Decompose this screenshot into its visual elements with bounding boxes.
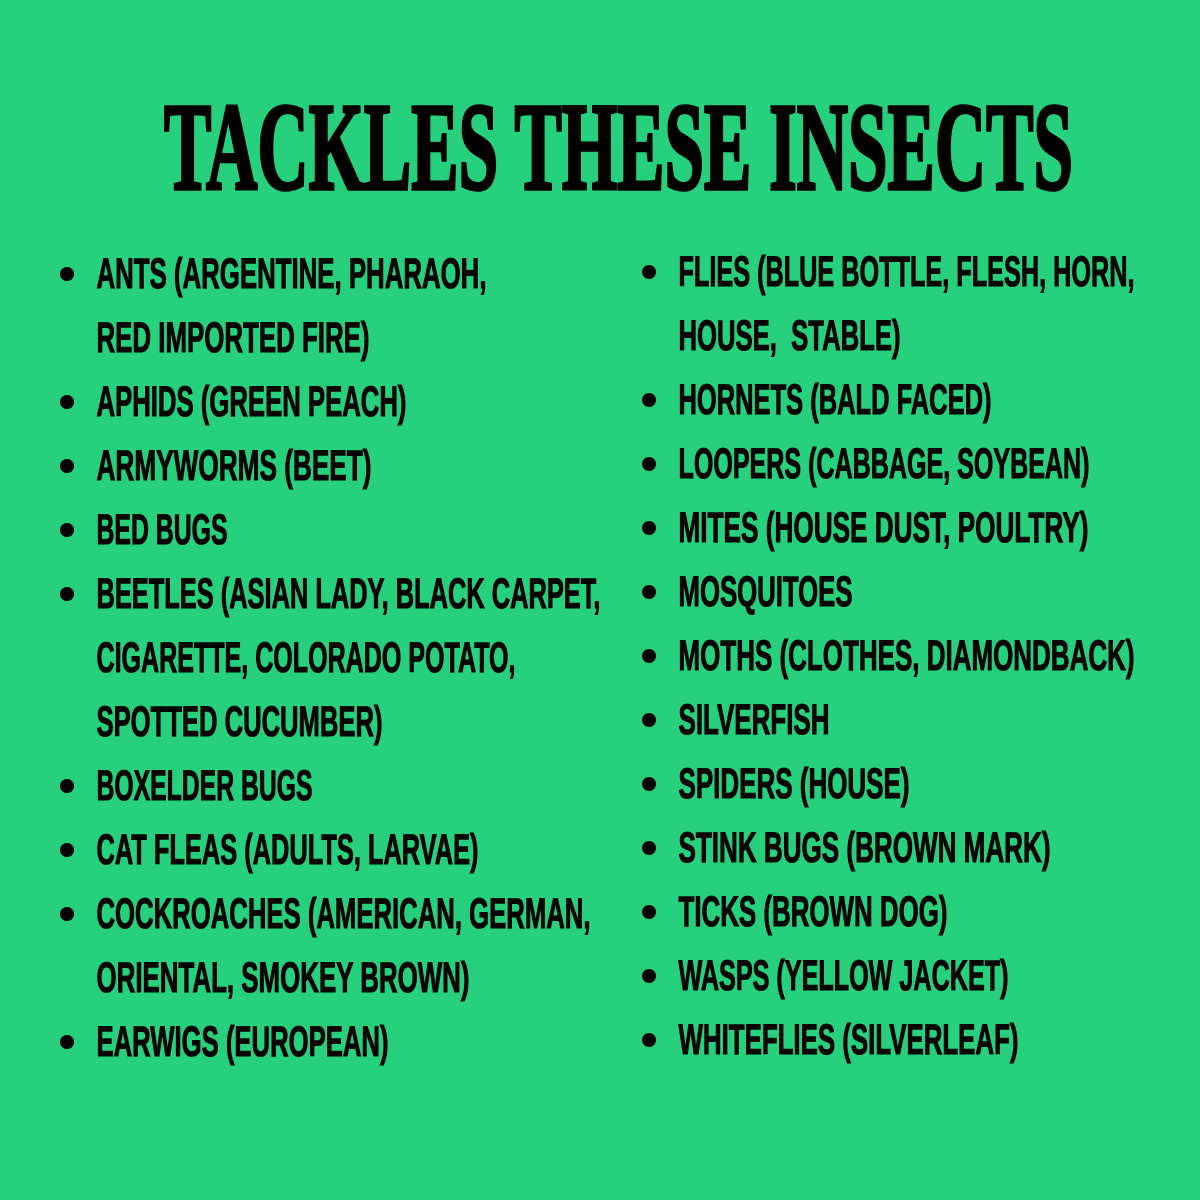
item: ants: ANTS (ARGENTINE, PHARAOH, — [96, 250, 486, 298]
item: ants — [60, 250, 486, 362]
item: bed bugs — [60, 506, 228, 554]
item: beetles: CIGARETTE, COLORADO POTATO, — [96, 634, 516, 682]
item: boxelder bugs: BOXELDER BUGS — [96, 762, 312, 810]
item: mosquitoes: MOSQUITOES — [678, 568, 852, 616]
item: ants: RED IMPORTED FIRE) — [96, 314, 370, 362]
item: ticks — [642, 888, 948, 936]
item: mosquitoes — [642, 568, 852, 616]
item: cockroaches — [60, 890, 590, 1002]
item: flies — [642, 248, 1134, 360]
item: armyworms — [60, 442, 372, 490]
item: spiders — [642, 760, 910, 808]
item: cockroaches: ORIENTAL, SMOKEY BROWN) — [96, 954, 470, 1002]
item: whiteflies — [642, 1016, 1018, 1064]
item: beetles — [60, 570, 600, 746]
item: bed bugs: BED BUGS — [96, 506, 228, 554]
item: cockroaches: COCKROACHES (AMERICAN, GERMAN, — [96, 890, 590, 938]
item: flies: HOUSE, STABLE) — [678, 312, 900, 360]
item: cat fleas: CAT FLEAS (ADULTS, LARVAE) — [96, 826, 478, 874]
item: earwigs: EARWIGS (EUROPEAN) — [96, 1018, 388, 1066]
item: spiders: SPIDERS (HOUSE) — [678, 760, 910, 808]
item: wasps — [642, 952, 1008, 1000]
item: aphids — [60, 378, 406, 426]
panel: left column list — [60, 250, 600, 1066]
item: beetles: SPOTTED CUCUMBER) — [96, 698, 382, 746]
item: beetles: BEETLES (ASIAN LADY, BLACK CARPET, — [96, 570, 600, 618]
item: armyworms: ARMYWORMS (BEET) — [96, 442, 372, 490]
item: silverfish — [642, 696, 830, 744]
item: cat fleas — [60, 826, 478, 874]
item: ticks: TICKS (BROWN DOG) — [678, 888, 948, 936]
item: hornets — [642, 376, 992, 424]
panel: right column list — [642, 248, 1134, 1064]
item: stink bugs — [642, 824, 1050, 872]
item: earwigs — [60, 1018, 388, 1066]
item: hornets: HORNETS (BALD FACED) — [678, 376, 992, 424]
item: silverfish: SILVERFISH — [678, 696, 830, 744]
item: boxelder bugs — [60, 762, 312, 810]
item: aphids: APHIDS (GREEN PEACH) — [96, 378, 406, 426]
